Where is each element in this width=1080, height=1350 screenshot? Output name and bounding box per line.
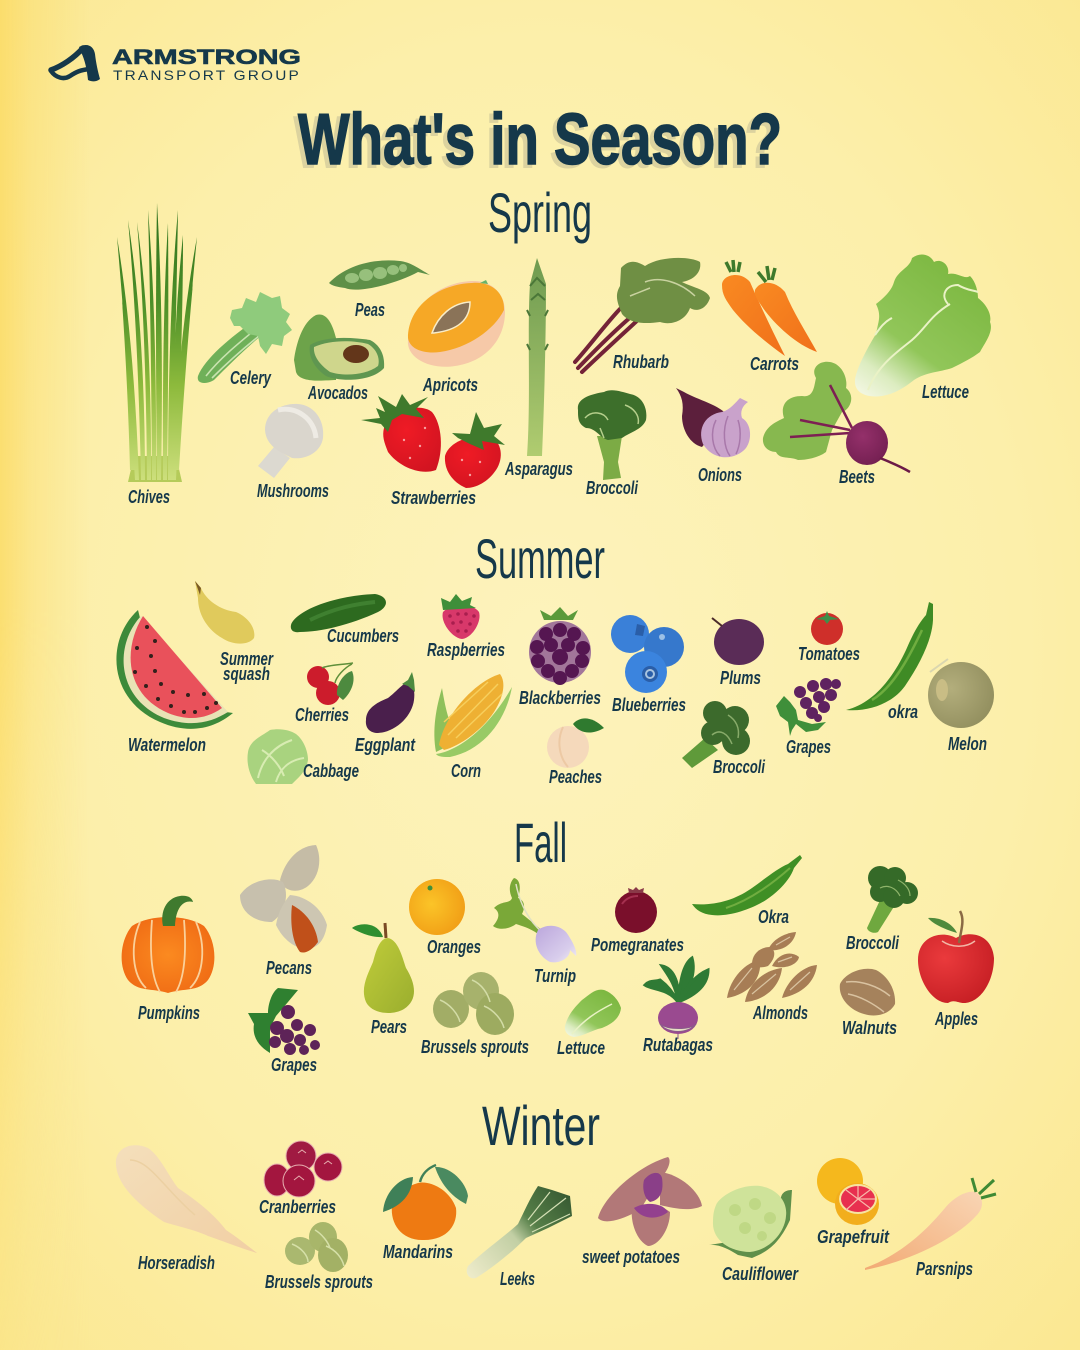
icon: blueberries — [611, 615, 684, 693]
icon: grapefruit — [817, 1158, 879, 1225]
label: sweet potatoes: sweet potatoes — [582, 1247, 680, 1267]
icon: rutabagas — [645, 958, 708, 1039]
icon: pears — [352, 923, 414, 1013]
label: Plums: Plums — [720, 668, 761, 688]
label: Apples: Apples — [934, 1009, 978, 1029]
heading: Spring: Spring — [488, 181, 592, 244]
label: Carrots: Carrots — [750, 354, 799, 374]
label: Eggplant: Eggplant — [355, 735, 416, 755]
label: Rutabagas: Rutabagas — [643, 1035, 713, 1055]
label: Pomegranates: Pomegranates — [591, 935, 684, 955]
label: Strawberries: Strawberries — [391, 488, 476, 508]
icon: cabbage — [247, 729, 308, 784]
logo mark — [51, 45, 100, 81]
icon: broccoli (fall) — [867, 866, 918, 933]
label: Apricots: Apricots — [422, 375, 478, 395]
label: Oranges: Oranges — [427, 937, 481, 957]
icon: peas — [329, 260, 430, 290]
icon: summer squash — [195, 581, 254, 644]
label: Lettuce: Lettuce — [922, 382, 969, 402]
label: Pumpkins: Pumpkins — [138, 1003, 200, 1023]
icon: turnip — [493, 878, 576, 962]
label: Beets: Beets — [839, 467, 875, 487]
label: Onions: Onions — [698, 465, 742, 485]
title: What's in Season? — [298, 100, 782, 180]
icon: peaches — [547, 718, 604, 768]
label: Mushrooms: Mushrooms — [257, 481, 329, 501]
icon: okra (summer) — [846, 602, 933, 710]
icon: pomegranates — [615, 887, 657, 933]
icon: horseradish — [116, 1145, 257, 1253]
label: Grapefruit: Grapefruit — [817, 1227, 890, 1247]
label: Tomatoes: Tomatoes — [798, 644, 860, 664]
label: Summer squash: squash — [223, 664, 270, 684]
label: Blueberries: Blueberries — [612, 695, 686, 715]
icon: carrots — [722, 260, 817, 356]
icon: lettuce — [855, 255, 991, 396]
icon: eggplant — [366, 672, 415, 733]
label: Cherries: Cherries — [295, 705, 349, 725]
icon: cranberries — [264, 1141, 342, 1197]
logo text — [112, 46, 301, 83]
label: Peas: Peas — [355, 300, 385, 320]
icon: brussels sprouts (fall) — [433, 972, 514, 1035]
icon: oranges — [409, 879, 465, 935]
label: Broccoli: Broccoli — [586, 478, 639, 498]
icon: watermelon — [116, 610, 233, 729]
label: Chives: Chives — [128, 487, 170, 507]
label: Parsnips: Parsnips — [916, 1259, 973, 1279]
icon: parsnips — [865, 1178, 996, 1270]
label: Corn: Corn — [451, 761, 481, 781]
icon: cherries — [307, 663, 354, 705]
label: Leeks: Leeks — [500, 1269, 535, 1289]
logo text: ARMSTRONG — [112, 46, 301, 69]
icon: cucumbers — [291, 594, 386, 632]
label: Brussels sprouts: Brussels sprouts — [421, 1037, 529, 1057]
icon: rhubarb — [575, 258, 710, 372]
label: Broccoli: Broccoli — [713, 757, 766, 777]
label: Grapes: Grapes — [786, 737, 831, 757]
label: Cauliflower: Cauliflower — [722, 1264, 799, 1284]
label: Horseradish: Horseradish — [138, 1253, 215, 1273]
icon: asparagus — [527, 258, 548, 456]
icon: leeks — [467, 1186, 572, 1278]
icon: pecans — [240, 845, 327, 953]
icon: blackberries — [529, 607, 591, 685]
icon: broccoli — [578, 390, 646, 480]
label: Melon: Melon — [948, 734, 987, 754]
label: Watermelon: Watermelon — [128, 735, 206, 755]
label: Avocados: Avocados — [307, 383, 368, 403]
label: Brussels sprouts: Brussels sprouts — [265, 1272, 373, 1292]
icon: mushrooms — [258, 404, 323, 478]
icon: corn — [434, 674, 512, 757]
icon: apricots — [408, 280, 505, 367]
label: Lettuce: Lettuce — [557, 1038, 605, 1058]
label: Cranberries: Cranberries — [259, 1197, 336, 1217]
icon: melon — [928, 659, 994, 728]
label: Celery: Celery — [230, 368, 272, 388]
icon: sweet potatoes — [598, 1157, 702, 1246]
label: Rhubarb: Rhubarb — [613, 352, 669, 372]
label: Grapes: Grapes — [271, 1055, 317, 1075]
label: Pecans: Pecans — [266, 958, 312, 978]
icon: strawberries — [361, 394, 505, 488]
icon: beets — [763, 362, 910, 472]
label: Cucumbers: Cucumbers — [327, 626, 399, 646]
label: Summer squash: Summer — [220, 649, 274, 669]
icon: tomatoes — [811, 611, 843, 645]
heading: Fall: Fall — [514, 811, 567, 874]
icon: celery — [198, 292, 292, 383]
icon: avocados — [294, 314, 384, 381]
icon: grapes (summer) — [776, 678, 841, 736]
label: Turnip: Turnip — [534, 966, 576, 986]
label: Summer squash — [220, 649, 274, 684]
label: Blackberries: Blackberries — [519, 688, 601, 708]
label: Pears: Pears — [371, 1017, 407, 1037]
label: Asparagus: Asparagus — [504, 459, 573, 479]
title: What's in Season? — [294, 103, 778, 183]
icon: pumpkins — [122, 896, 214, 993]
icon: cauliflower — [709, 1186, 792, 1258]
label: Mandarins: Mandarins — [383, 1242, 453, 1262]
label: Raspberries: Raspberries — [427, 640, 505, 660]
icon: chives — [117, 203, 197, 482]
icon: apples — [918, 911, 994, 1003]
label: okra: okra — [888, 702, 918, 722]
label: Okra: Okra — [758, 907, 789, 927]
icon: onions — [676, 388, 750, 457]
icon: almonds — [727, 932, 817, 1002]
icon: lettuce (fall) — [565, 990, 621, 1037]
icon: broccoli (summer) — [682, 701, 750, 768]
label: Peaches: Peaches — [549, 767, 602, 787]
icon: walnuts — [840, 969, 895, 1016]
label: Walnuts: Walnuts — [842, 1018, 897, 1038]
icon: grapes (fall) — [248, 988, 320, 1055]
icon: okra (fall) — [692, 855, 802, 915]
label: Almonds: Almonds — [752, 1003, 808, 1023]
heading: Summer: Summer — [475, 527, 605, 590]
label: Cabbage: Cabbage — [303, 761, 359, 781]
logo: Armstrong Transport Group — [51, 45, 301, 83]
icon: plums — [712, 618, 764, 665]
heading: Winter: Winter — [482, 1094, 600, 1157]
label: Broccoli: Broccoli — [846, 933, 900, 953]
logo text: TRANSPORT GROUP — [113, 67, 301, 83]
icon: brussels sprouts (winter) — [285, 1222, 348, 1272]
icon: raspberries — [441, 594, 480, 639]
icon: mandarins — [383, 1165, 468, 1240]
